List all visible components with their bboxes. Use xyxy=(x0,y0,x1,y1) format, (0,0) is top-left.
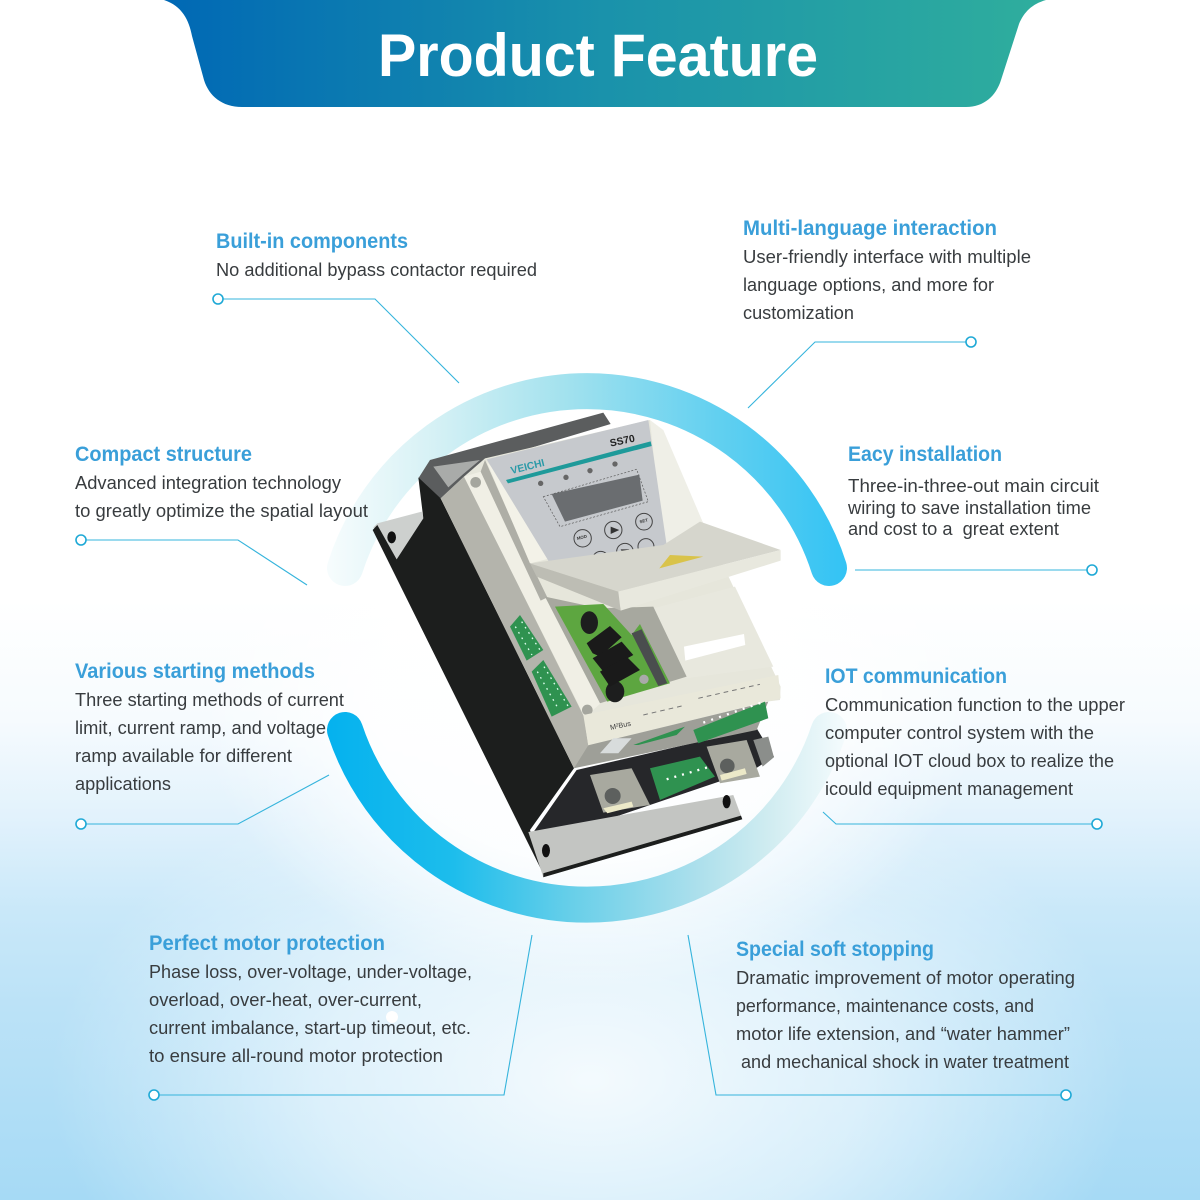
cream housing xyxy=(441,420,781,768)
feature: special soft stopping xyxy=(736,938,1075,1072)
keypad buttons xyxy=(574,513,654,567)
feature: various starting methods: Three starting methods of current xyxy=(75,689,344,710)
feature: IOT communication: Communication function to the upper xyxy=(825,694,1125,715)
feature: IOT communication: icould equipment management xyxy=(825,778,1073,799)
feature: various starting methods: Various starting methods xyxy=(75,660,315,683)
product illustration: SS70 soft starter: VEICHI xyxy=(510,458,546,477)
control panel xyxy=(487,420,667,563)
feature: special soft stopping: Dramatic improvement of motor operating xyxy=(736,967,1075,988)
feature: easy installation: wiring to save installation time xyxy=(847,497,1091,518)
feature: easy installation: Three-in-three-out main circuit xyxy=(848,475,1099,496)
central ring xyxy=(345,391,829,905)
feature: multi-language interaction xyxy=(743,217,1031,323)
product illustration: SS70 soft starter: SET xyxy=(639,517,649,524)
feature: various starting methods: applications xyxy=(75,773,171,794)
feature: IOT communication: optional IOT cloud box to realize the xyxy=(825,750,1114,771)
feature: perfect motor protection: overload, over-heat, over-current, xyxy=(149,989,422,1010)
connector: compact structure xyxy=(76,535,307,585)
LCD display xyxy=(543,469,648,527)
feature: perfect motor protection: Phase loss, over-voltage, under-voltage, xyxy=(149,961,472,982)
connector: motor protection xyxy=(149,935,532,1100)
black side body xyxy=(373,477,588,877)
feature: perfect motor protection: to ensure all-round motor protection xyxy=(149,1045,443,1066)
capacitors xyxy=(581,611,598,634)
product illustration: SS70 soft starter: MOD xyxy=(576,534,587,541)
feature: compact structure: to greatly optimize the spatial layout xyxy=(75,500,368,521)
product illustration: SS70 soft starter: SS70 xyxy=(609,434,636,450)
pin header xyxy=(632,629,667,686)
feature: perfect motor protection: current imbalance, start-up timeout, etc. xyxy=(149,1017,471,1038)
feature: multi-language interaction: language options, and more for xyxy=(743,274,994,295)
feature: compact structure: Compact structure xyxy=(75,443,252,466)
feature: IOT communication xyxy=(825,665,1125,799)
feature: special soft stopping: and mechanical shock in water treatment xyxy=(741,1051,1069,1072)
connector: easy installation xyxy=(855,565,1097,575)
feature: perfect motor protection: Perfect motor protection xyxy=(149,932,385,955)
feature: easy installation xyxy=(847,443,1099,539)
feature: easy installation: and cost to a great extent xyxy=(848,518,1059,539)
connector: soft stopping xyxy=(688,935,1071,1100)
bottom mounting flange xyxy=(528,795,742,877)
terminal labels: M²Bus xyxy=(609,719,632,732)
feature: multi-language interaction: customization xyxy=(743,302,854,323)
feature: IOT communication: computer control system with the xyxy=(825,722,1094,743)
feature: special soft stopping: performance, maintenance costs, and xyxy=(736,995,1034,1016)
header banner with title xyxy=(164,0,1046,107)
feature: various starting methods: ramp available for different xyxy=(75,745,292,766)
feature: compact structure xyxy=(75,443,368,521)
feature: built-in components xyxy=(216,230,537,280)
housing side bands xyxy=(441,477,588,768)
green terminal blocks xyxy=(510,615,543,661)
cream area and label xyxy=(653,587,773,678)
bottom dark terminal section xyxy=(533,728,774,832)
mounting flange top xyxy=(373,512,424,560)
feature: IOT communication: IOT communication xyxy=(825,665,1007,688)
feature: compact structure: Advanced integration technology xyxy=(75,472,342,493)
feature: various starting methods: limit, current ramp, and voltage xyxy=(75,717,326,738)
connector: starting methods xyxy=(76,775,329,829)
feature: perfect motor protection xyxy=(149,932,472,1066)
feature: built-in components: No additional bypass contactor required xyxy=(216,259,537,280)
flip cover xyxy=(530,522,781,592)
relays xyxy=(587,626,622,657)
feature: various starting methods xyxy=(75,660,344,794)
feature: special soft stopping: motor life extension, and “water hammer” xyxy=(736,1023,1070,1044)
opening with circuit board xyxy=(545,597,687,703)
connector: multi-language interaction xyxy=(748,337,976,408)
title: Product Feature xyxy=(378,22,818,89)
connector: IOT communication xyxy=(823,812,1102,829)
feature: built-in components: Built-in components xyxy=(216,230,408,253)
rear top housing xyxy=(418,413,611,500)
feature: special soft stopping: Special soft stopping xyxy=(736,938,934,961)
front strip xyxy=(583,675,781,745)
feature: multi-language interaction: User-friendly interface with multiple xyxy=(743,246,1031,267)
feature: easy installation: Eacy installation xyxy=(848,443,1002,466)
connector: built-in components xyxy=(213,294,459,383)
feature: multi-language interaction: Multi-language interaction xyxy=(743,217,997,240)
product illustration: SS70 soft starter xyxy=(373,413,781,877)
